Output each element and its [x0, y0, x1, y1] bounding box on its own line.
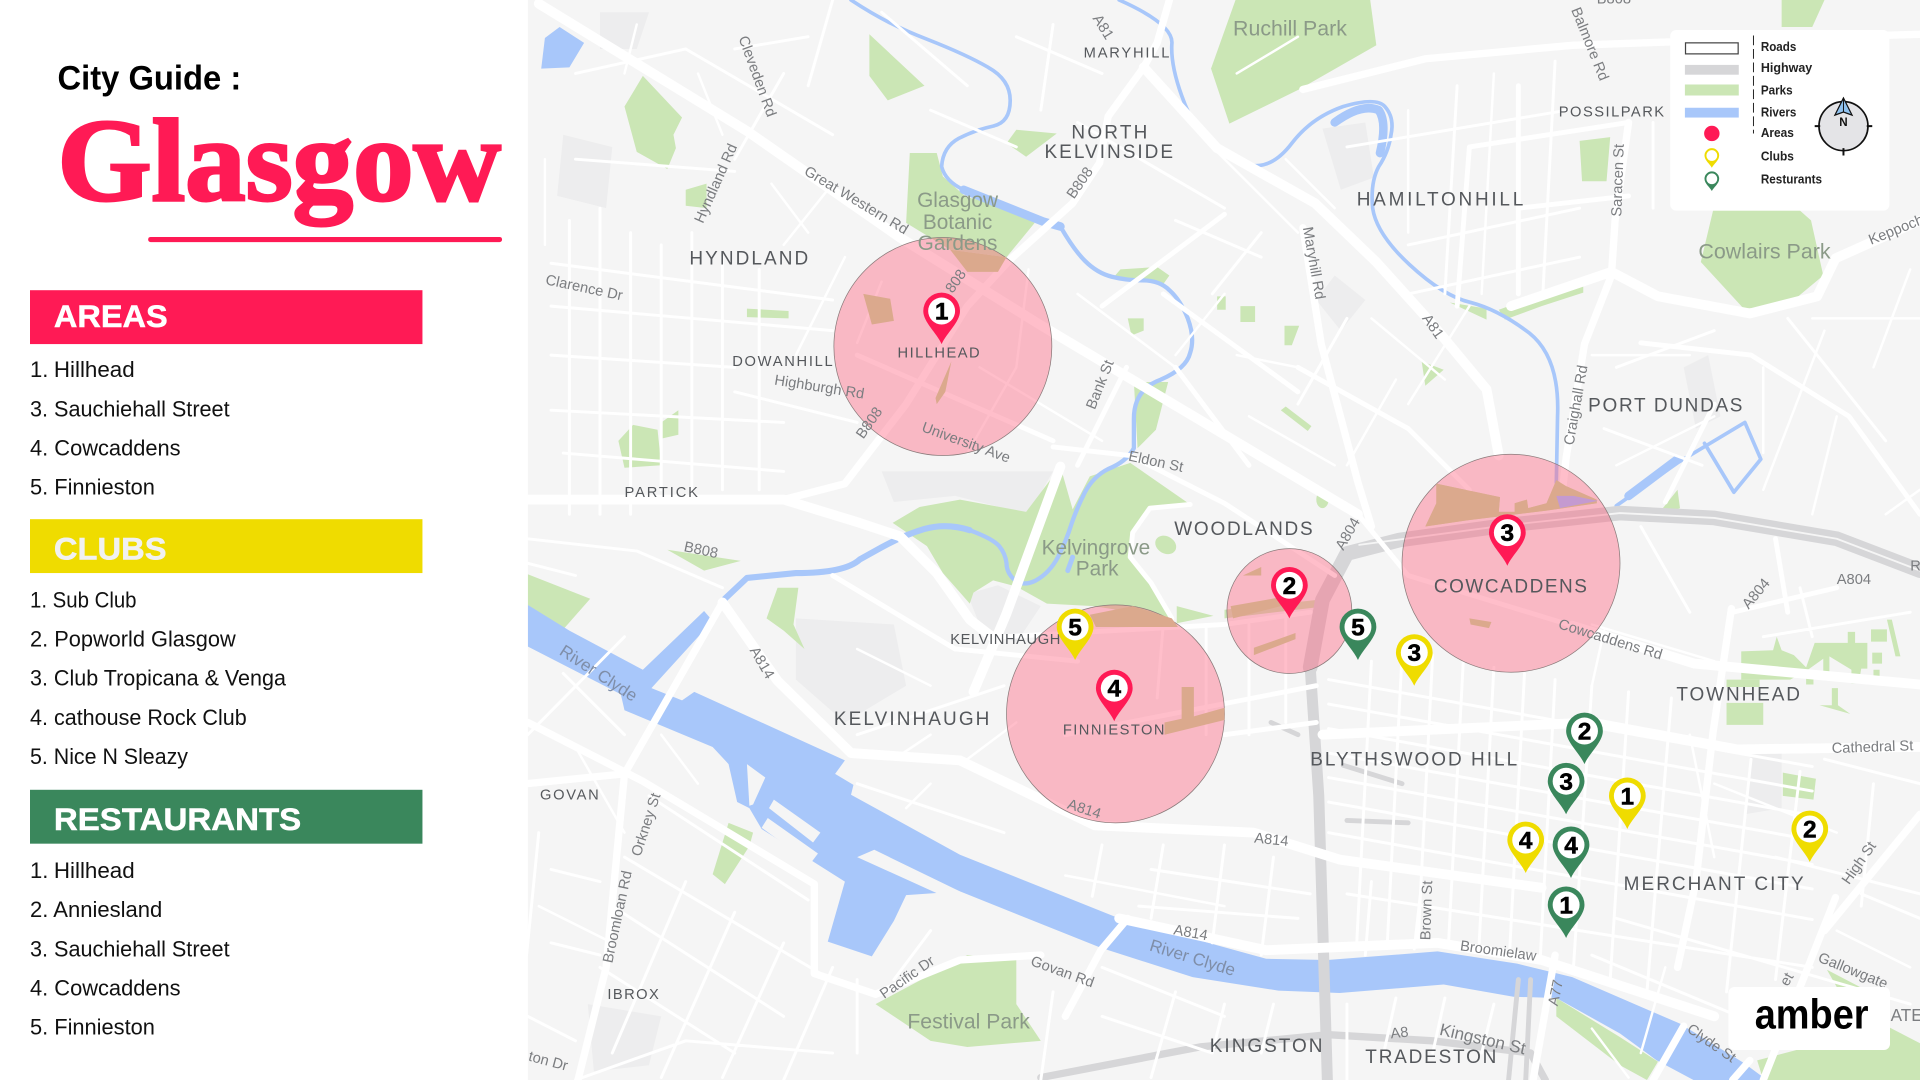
neighbourhood labels: BLYTHSWOOD HILL	[1310, 749, 1517, 770]
road labels: High St	[1839, 839, 1880, 888]
list: areas: 5. Finnieston	[30, 475, 155, 500]
road labels	[527, 0, 1920, 1075]
pin: restaurant 4	[1553, 827, 1589, 878]
neighbourhood labels: WOODLANDS	[1174, 519, 1313, 540]
park labels: Park	[1076, 558, 1119, 581]
road labels: Eldon St	[1127, 449, 1185, 476]
title: Glasgow: Glasgow	[58, 96, 501, 226]
neighbourhood labels: MARYHILL	[1084, 46, 1169, 62]
road labels: Broomielaw	[1459, 938, 1538, 965]
road labels: B808	[1064, 165, 1097, 202]
road labels: A8	[1390, 1025, 1409, 1042]
legend swatch: roads	[1686, 43, 1738, 54]
list: restaurants: 2. Anniesland	[30, 897, 162, 922]
pin: restaurant 5	[1340, 609, 1376, 660]
list: areas: 4. Cowcaddens	[30, 436, 181, 461]
title underline	[148, 237, 502, 242]
road labels: River Clyde	[556, 640, 641, 705]
neighbourhood labels: PARTICK	[624, 485, 698, 501]
road labels: Brown St	[1418, 880, 1436, 941]
list: areas	[30, 357, 230, 500]
road labels: Pacific Dr	[877, 953, 938, 1002]
neighbourhood labels: MERCHANT CITY	[1624, 874, 1804, 895]
building and industrial blocks	[557, 12, 1782, 1071]
road labels: Great Western Rd	[801, 164, 911, 238]
park labels: Festival Park	[907, 1011, 1030, 1034]
pin: restaurant 5: 5	[1351, 615, 1365, 642]
neighbourhood labels: FINNIESTON	[1063, 723, 1164, 739]
compass	[1815, 98, 1872, 156]
legend labels	[1761, 39, 1822, 187]
list: restaurants	[30, 858, 230, 1040]
neighbourhood labels: DOWANHILL	[732, 354, 833, 370]
park labels: Botanic	[923, 211, 992, 234]
road labels: Cathedral St	[1831, 738, 1914, 757]
neighbourhood labels: KELVINHAUGH	[950, 632, 1060, 648]
park labels	[907, 18, 1831, 1034]
road labels: A814	[746, 644, 777, 682]
neighbourhood labels: HAMILTONHILL	[1357, 190, 1523, 211]
panel: map of Glasgow	[527, 0, 1920, 1080]
road labels: ton Dr	[527, 1049, 570, 1075]
pin: club 1: 1	[1621, 783, 1634, 810]
road labels: University Ave	[919, 420, 1012, 467]
panel: legend	[1670, 30, 1889, 211]
park labels: Ruchill Park	[1233, 18, 1348, 41]
compass: N	[1839, 116, 1848, 129]
pins: areas	[923, 293, 1526, 721]
pin: club 2	[1791, 811, 1828, 862]
neighbourhood labels: KINGSTON	[1210, 1036, 1322, 1057]
road labels: Broomloan Rd	[601, 869, 636, 965]
neighbourhood labels: KELVINHAUGH	[834, 709, 989, 730]
road labels: River Clyde	[1147, 935, 1238, 980]
area: Cowcaddens	[1402, 454, 1620, 672]
road labels: Clarence Dr	[544, 272, 624, 304]
section: restaurants	[30, 790, 422, 1040]
road labels: A804	[1739, 576, 1774, 612]
road labels: Craighall Rd	[1562, 364, 1591, 446]
road labels: Kingston St	[1438, 1019, 1528, 1058]
road labels: Balmore Rd	[1567, 5, 1611, 83]
rivers and lakes	[528, 0, 1767, 1080]
pin: club 4	[1507, 822, 1544, 873]
highways	[1041, 513, 1920, 1080]
neighbourhood labels: POSSILPARK	[1559, 104, 1664, 120]
neighbourhood labels	[540, 46, 1804, 1068]
pin: restaurant 2: 2	[1578, 719, 1591, 746]
pin: club 2: 2	[1803, 817, 1817, 844]
neighbourhood labels: HYNDLAND	[689, 248, 808, 269]
pin: area 3	[1489, 514, 1526, 566]
heading text: areas: AREAS	[54, 299, 168, 334]
pins: restaurants	[1340, 609, 1603, 938]
roads	[527, 0, 1920, 1080]
legend labels: Resturants	[1761, 172, 1822, 187]
pin: area 2	[1271, 567, 1308, 618]
pin: club 3	[1396, 634, 1433, 686]
heading text: restaurants: RESTAURANTS	[54, 802, 301, 837]
road labels: Hyndland Rd	[692, 142, 741, 226]
panel: sidebar	[0, 0, 528, 1080]
list: restaurants: Hillhead	[54, 858, 135, 883]
road labels: A81	[1089, 12, 1116, 43]
neighbourhood labels: TRADESTON	[1365, 1047, 1496, 1068]
park labels: Gardens	[918, 232, 997, 255]
road labels: A814	[1253, 831, 1289, 850]
road labels: Cleveden Rd	[735, 34, 779, 119]
area: Finnieston	[1007, 605, 1224, 823]
road labels: Gallowgate	[1816, 950, 1890, 992]
heading bar: restaurants	[30, 790, 422, 844]
pin: restaurant 3	[1548, 763, 1584, 814]
pin: restaurant 4: 4	[1564, 832, 1578, 859]
pin: area 2: 2	[1283, 573, 1296, 600]
road labels: Cowcaddens Rd	[1556, 617, 1664, 664]
pin: restaurant 1: 1	[1559, 892, 1573, 919]
list: clubs: 1. Sub Club	[30, 587, 137, 612]
neighbourhood labels: GOVAN	[540, 788, 599, 804]
park labels: Glasgow	[917, 189, 999, 212]
legend labels: Roads	[1761, 39, 1796, 54]
list: clubs: 5. Nice N Sleazy	[30, 744, 188, 769]
park labels: Cowlairs Park	[1698, 240, 1831, 263]
pin: area 1	[923, 293, 960, 344]
road labels: Orkney St	[629, 791, 664, 858]
pin: club 5: 5	[1068, 615, 1082, 642]
road labels: Bank St	[1084, 358, 1118, 412]
Kelvin and canal	[725, 0, 1761, 599]
list: clubs	[30, 587, 287, 769]
logo: amber	[1728, 987, 1890, 1050]
road labels: Highburgh Rd	[773, 373, 865, 403]
legend swatch: areas	[1704, 126, 1720, 141]
legend swatch: highway	[1685, 65, 1739, 75]
pin: area 3: 3	[1501, 520, 1514, 547]
area: Hillhead	[834, 238, 1052, 456]
list: areas: 3. Sauchiehall Street	[30, 396, 230, 421]
pin: restaurant 2	[1566, 713, 1603, 764]
neighbourhood labels: IBROX	[607, 987, 659, 1003]
legend swatch: restaurants	[1704, 171, 1719, 191]
park labels: Kelvingrove	[1042, 537, 1150, 560]
neighbourhood labels: HILLHEAD	[898, 346, 980, 362]
road labels: A804	[1333, 515, 1364, 553]
list: areas: Hillhead	[54, 357, 135, 382]
road labels: et	[1777, 970, 1797, 989]
heading text: clubs: CLUBS	[54, 532, 167, 567]
list: clubs: 3. Club Tropicana & Venga	[30, 666, 287, 691]
area circles	[834, 238, 1620, 823]
legend labels: Clubs	[1761, 148, 1794, 163]
road labels: A81	[1418, 311, 1446, 342]
parks	[528, 0, 1920, 1080]
road labels: B808	[853, 405, 886, 442]
section: clubs	[30, 519, 422, 769]
pin: club 5	[1057, 609, 1093, 660]
road labels: A77	[1546, 978, 1567, 1007]
section: areas	[30, 290, 422, 500]
list: restaurants: 4. Cowcaddens	[30, 976, 181, 1001]
pin: area 1: 1	[935, 299, 948, 326]
neighbourhood labels: COWCADDENS	[1434, 577, 1587, 598]
heading bar: areas	[30, 290, 422, 344]
legend swatch: rivers	[1685, 108, 1739, 118]
legend swatch: parks	[1685, 84, 1739, 96]
list: clubs: 2. Popworld Glasgow	[30, 627, 236, 652]
heading: City Guide: City Guide :	[58, 59, 241, 97]
neighbourhood labels: NORTH	[1071, 122, 1147, 143]
legend labels: Highway	[1761, 60, 1813, 75]
legend labels: Rivers	[1761, 104, 1796, 119]
pins: clubs	[1057, 609, 1828, 873]
pin: club 4: 4	[1519, 828, 1533, 855]
road labels: Maryhill Rd	[1299, 226, 1327, 301]
list: clubs: 4. cathouse Rock Club	[30, 705, 247, 730]
list: restaurants: 1.	[30, 858, 48, 883]
legend labels: Parks	[1761, 82, 1793, 97]
road labels: B808	[682, 539, 719, 562]
pin: restaurant 1	[1548, 887, 1584, 938]
road labels: A804	[1837, 572, 1871, 588]
road labels: Govan Rd	[1028, 954, 1096, 991]
pin: restaurant 3: 3	[1559, 769, 1573, 796]
neighbourhood labels: PORT DUNDAS	[1588, 395, 1742, 416]
list: restaurants: 5. Finnieston	[30, 1015, 155, 1040]
list: areas: 1.	[30, 357, 48, 382]
neighbourhood labels: KELVINSIDE	[1044, 142, 1173, 163]
legend labels: Areas	[1761, 125, 1794, 140]
pin: club 1	[1609, 778, 1646, 829]
legend swatch: clubs	[1704, 148, 1719, 168]
heading bar: clubs	[30, 519, 422, 573]
pin: club 3: 3	[1407, 640, 1421, 667]
area: Sauchiehall Street	[1227, 549, 1352, 673]
road labels: A814	[1065, 797, 1103, 823]
neighbourhood labels: TOWNHEAD	[1676, 684, 1800, 705]
road labels: Clyde St	[1684, 1021, 1738, 1066]
list: restaurants: 3. Sauchiehall Street	[30, 936, 230, 961]
road labels: A814	[1172, 922, 1209, 944]
pin: area 4: 4	[1107, 676, 1121, 703]
logo: amber: amber	[1755, 991, 1869, 1038]
road labels: Saracen St	[1609, 144, 1628, 217]
road labels: 808	[943, 267, 970, 296]
pin: area 4	[1096, 670, 1133, 721]
